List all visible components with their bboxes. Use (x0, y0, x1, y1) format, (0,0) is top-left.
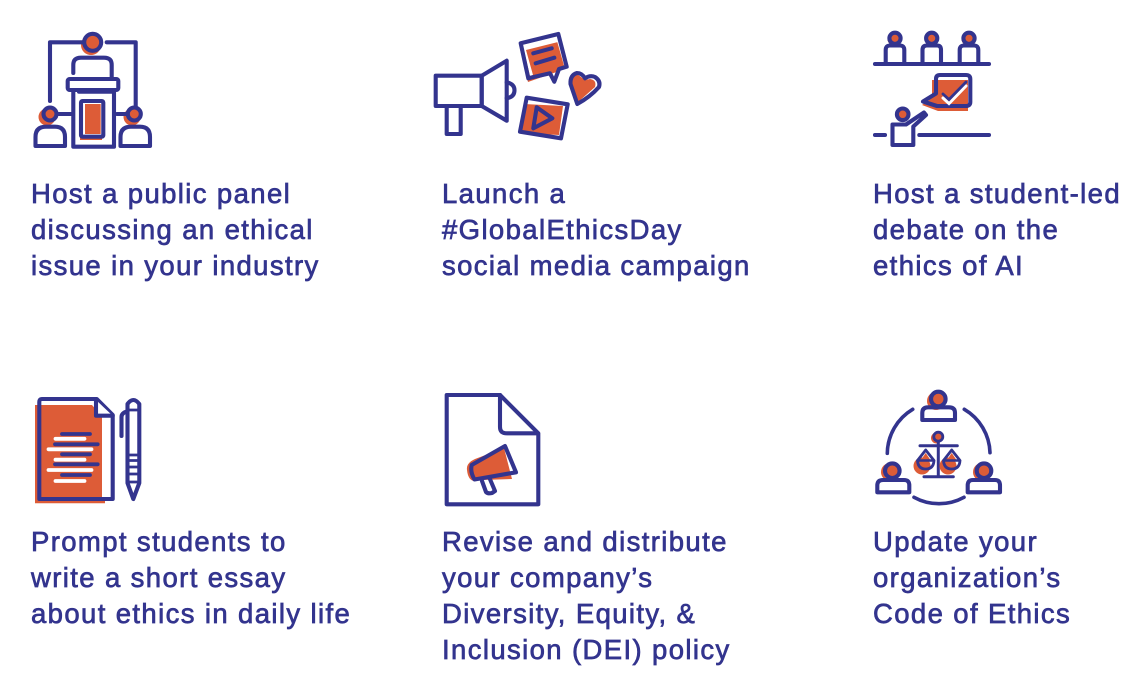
text: revise DEI policy: Diversity, Equity, & (442, 598, 696, 629)
text: update code of ethics: Code of Ethics (873, 598, 1071, 629)
text: host a student-led debate: debate on the (873, 214, 1059, 245)
text: host a student-led debate: Host a student-led (873, 178, 1121, 209)
text: revise DEI policy: Inclusion (DEI) policy (442, 634, 731, 665)
text: revise DEI policy: your company’s (442, 562, 653, 593)
text: host a public panel (31, 178, 320, 282)
text: host a public panel: discussing an ethical (31, 214, 314, 245)
icon: essay document and pen (35, 399, 139, 503)
text: update code of ethics: Update your (873, 526, 1038, 557)
text: prompt students to write essay: about ethics in daily life (31, 598, 351, 629)
icon: megaphone with social media posts (436, 34, 600, 138)
text: host a student-led debate (873, 178, 1121, 281)
icon: student-led debate (875, 32, 989, 145)
text: launch a social media campaign: #GlobalEthicsDay (442, 214, 683, 245)
text: update code of ethics (873, 526, 1071, 629)
text: prompt students to write essay (30, 526, 351, 630)
text: update code of ethics: organization’s (873, 562, 1062, 593)
icon: policy document with megaphone (447, 395, 538, 504)
text: prompt students to write essay: write a short essay (31, 562, 286, 593)
text: revise DEI policy (442, 526, 731, 666)
icon: code of ethics group with scales (877, 392, 1000, 504)
text: host a public panel: issue in your industry (31, 250, 320, 281)
text: launch a social media campaign: social media campaign (442, 250, 751, 281)
text: revise DEI policy: Revise and distribute (442, 526, 728, 557)
icon: public panel at podium (36, 34, 150, 147)
text: host a public panel: Host a public panel (31, 178, 291, 209)
text: prompt students to write essay: Prompt students to (31, 526, 287, 557)
text: host a student-led debate: ethics of AI (873, 250, 1024, 281)
text: launch a social media campaign (442, 178, 751, 282)
text: launch a social media campaign: Launch a (442, 178, 566, 209)
